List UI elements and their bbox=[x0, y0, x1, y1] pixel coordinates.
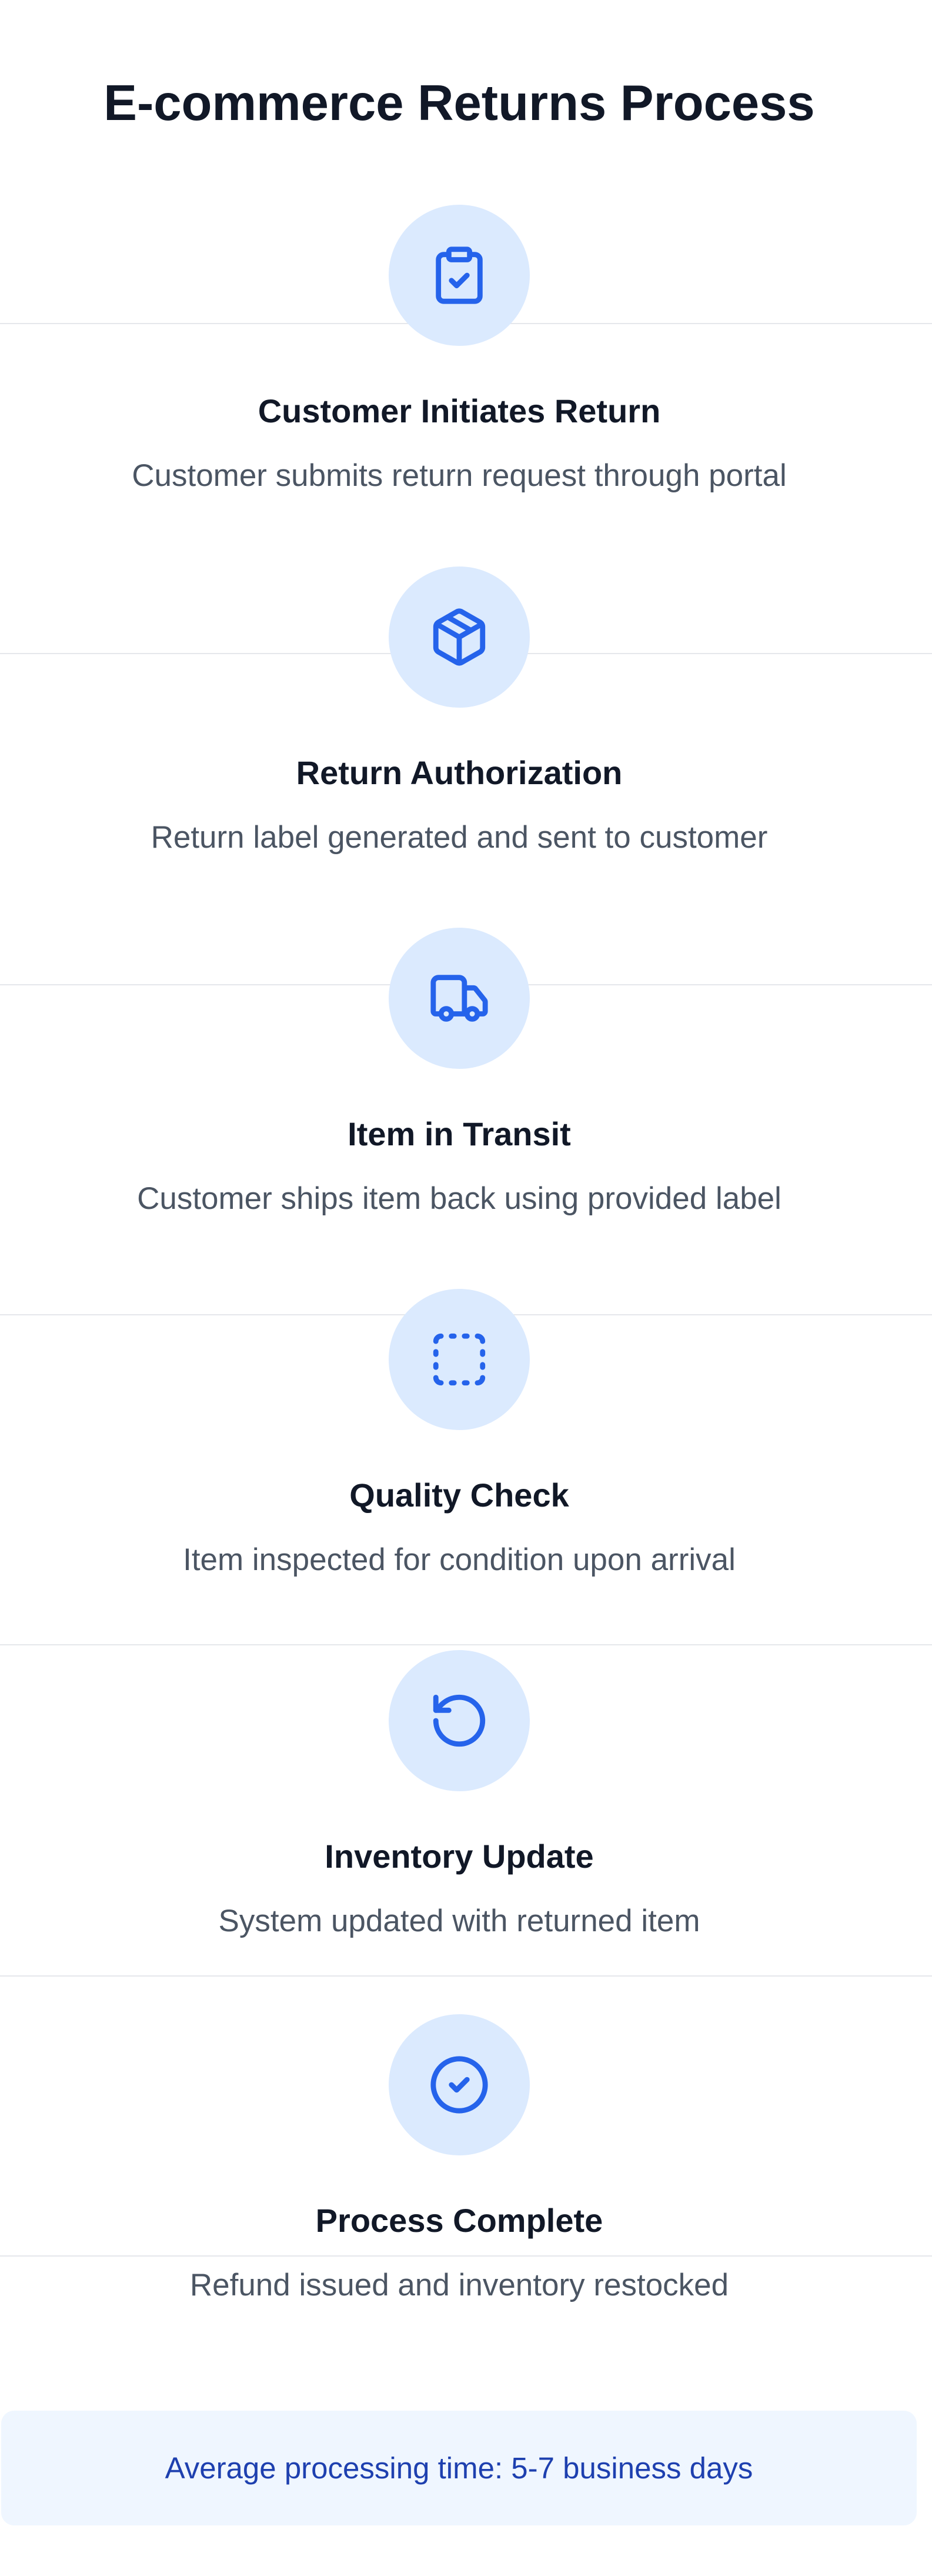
title: E-commerce Returns Process bbox=[103, 75, 815, 131]
step description: Item inspected for condition upon arrival bbox=[183, 1542, 736, 1577]
callout: average processing time: Average processing time: 5-7 business days bbox=[165, 2451, 753, 2485]
step title: Customer Initiates Return bbox=[258, 392, 660, 429]
icon: truck bbox=[389, 928, 530, 1069]
step 3: item in transit bbox=[137, 928, 781, 1216]
step description: System updated with returned item bbox=[219, 1904, 700, 1938]
step title: Inventory Update bbox=[325, 1838, 594, 1875]
step description: Refund issued and inventory restocked bbox=[190, 2268, 729, 2302]
step description: Customer submits return request through portal bbox=[132, 458, 787, 493]
step title: Item in Transit bbox=[348, 1115, 571, 1152]
step 2: return authorization bbox=[151, 566, 767, 855]
step 5: inventory update bbox=[219, 1650, 700, 1938]
icon: clipboard check bbox=[389, 205, 530, 346]
step title: Process Complete bbox=[316, 2202, 603, 2239]
step description: Customer ships item back using provided label bbox=[137, 1181, 781, 1216]
step 4: quality check bbox=[183, 1289, 736, 1577]
step 6: process complete bbox=[190, 2014, 729, 2302]
step title: Quality Check bbox=[349, 1477, 569, 1514]
step 1: customer initiates return bbox=[132, 205, 787, 493]
step title: Return Authorization bbox=[296, 754, 622, 791]
step description: Return label generated and sent to customer bbox=[151, 820, 767, 855]
icon: rotate ccw bbox=[389, 1650, 530, 1791]
icon: package box bbox=[389, 566, 530, 708]
icon: circle check bbox=[389, 2014, 530, 2155]
callout: average processing time bbox=[1, 2411, 917, 2525]
icon: dashed square bbox=[389, 1289, 530, 1430]
